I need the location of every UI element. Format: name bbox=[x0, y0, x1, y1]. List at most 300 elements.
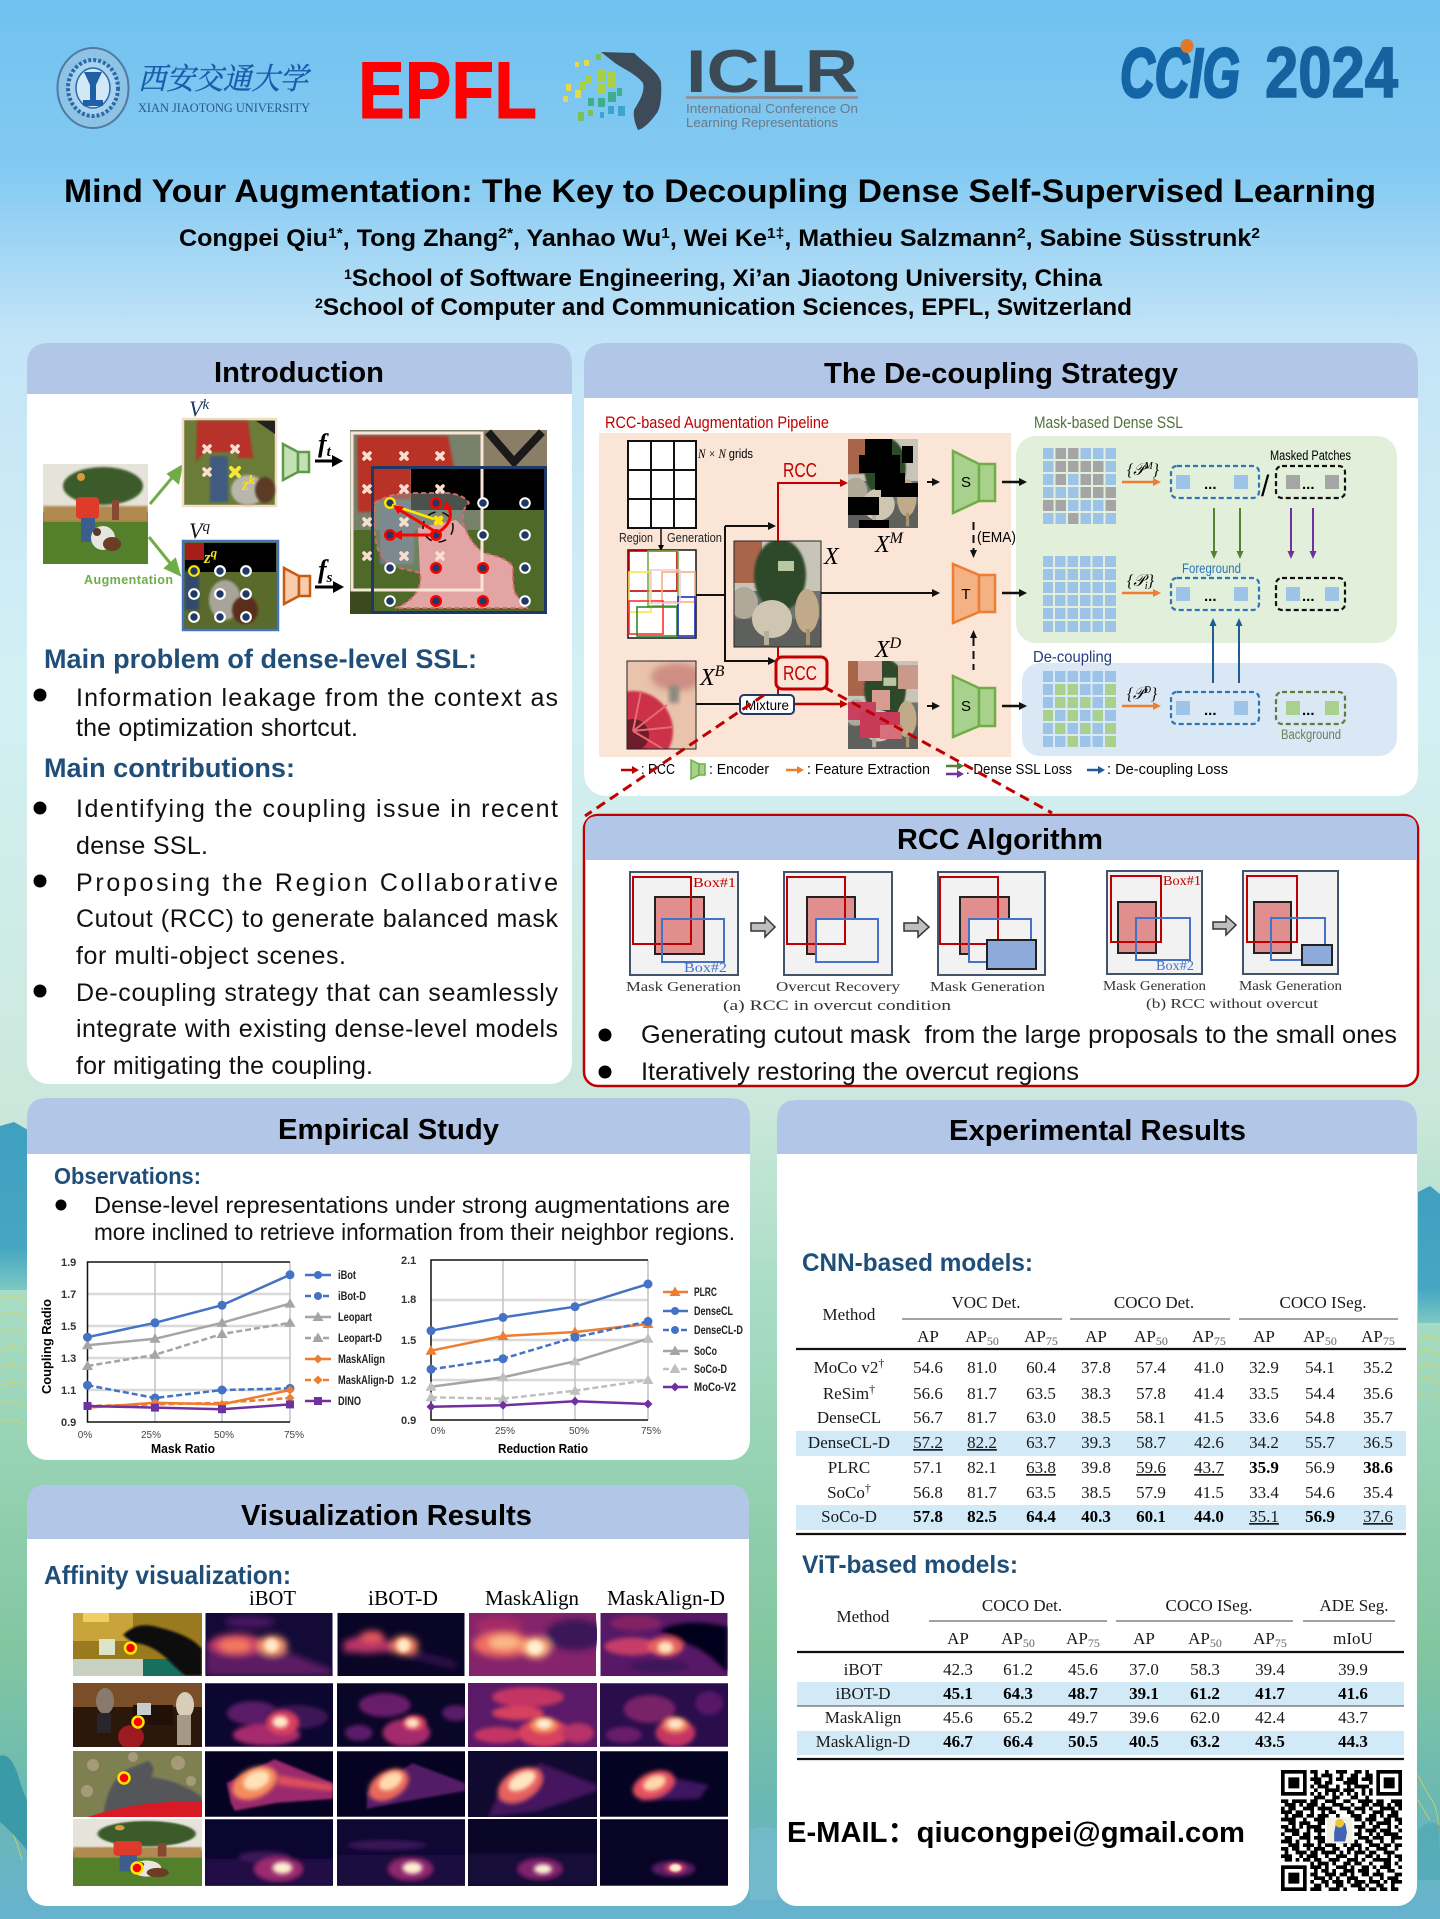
row: SoCo-D: 37.6 bbox=[1363, 1507, 1393, 1526]
row: iBOT: 61.2 bbox=[1003, 1660, 1033, 1679]
row: iBOT-D: 64.3 bbox=[1003, 1684, 1033, 1703]
logo: Xi'an Jiaotong University bbox=[58, 48, 312, 128]
row: MoCo v2: 37.8 bbox=[1081, 1358, 1111, 1377]
orange feature arrows bbox=[1122, 478, 1161, 710]
row: MoCo v2: 81.0 bbox=[967, 1358, 997, 1377]
table: ViT-based models: mIoU bbox=[1333, 1629, 1373, 1648]
row: SoCo-D: 82.5 bbox=[967, 1507, 997, 1526]
row: MaskAlign-D: 66.4 bbox=[1003, 1732, 1033, 1751]
table: ViT-based models: AP bbox=[1188, 1629, 1210, 1648]
authors: 2 bbox=[1251, 225, 1260, 242]
table: ViT-based models: AP bbox=[1133, 1629, 1155, 1648]
row: DenseCL bbox=[817, 1408, 1393, 1427]
row: iBOT-D: 39.1 bbox=[1129, 1684, 1159, 1703]
chart: reduction ratio: 1.5 bbox=[401, 1335, 416, 1347]
token set labels bbox=[1127, 460, 1159, 592]
table: CNN-based models: COCO ISeg. bbox=[1280, 1293, 1366, 1312]
chart: reduction ratio: Reduction Ratio bbox=[498, 1442, 588, 1456]
row: MoCo v2: † bbox=[878, 1356, 884, 1370]
row: iBOT: 39.9 bbox=[1338, 1660, 1368, 1679]
module: de-coupling: ... bbox=[1302, 702, 1315, 719]
chart: mask ratio: 50% bbox=[214, 1430, 234, 1441]
step 3 bbox=[938, 872, 1045, 975]
row: DenseCL-D: 63.7 bbox=[1026, 1433, 1056, 1452]
table: ViT-based models: AP bbox=[1001, 1629, 1023, 1648]
view Vq: V bbox=[189, 518, 202, 543]
text: main problem: Main problem of dense-level SSL: bbox=[44, 644, 477, 674]
row: DenseCL: 63.0 bbox=[1026, 1408, 1056, 1427]
row: MaskAlign-D: 63.2 bbox=[1190, 1732, 1220, 1751]
panel: Visualization Results bbox=[27, 1485, 749, 1906]
table: ViT-based models: 75 bbox=[1275, 1636, 1287, 1650]
row: SoCo: 54.6 bbox=[1305, 1483, 1335, 1502]
encoder S top: S bbox=[961, 474, 971, 491]
step 2 bbox=[784, 872, 892, 975]
label: RCC: RCC bbox=[783, 460, 817, 482]
token boxes bbox=[1171, 466, 1345, 610]
logo: ICLR: ICLR bbox=[686, 38, 858, 105]
chart: reduction ratio: 2.1 bbox=[401, 1255, 416, 1267]
row: DenseCL: 33.6 bbox=[1249, 1408, 1279, 1427]
chart: mask ratio: 0% bbox=[78, 1430, 92, 1441]
diagram: RCC in overcut condition bbox=[626, 872, 1045, 1014]
row: PLRC: 35.9 bbox=[1249, 1458, 1279, 1477]
text: observations: more inclined to retrieve information from their neighbor regions. bbox=[94, 1219, 735, 1245]
encoder: student bbox=[284, 568, 310, 604]
text: main contributions: Proposing the Region Collaborative bbox=[76, 869, 558, 897]
chart: mask ratio: 1.5 bbox=[61, 1321, 76, 1333]
row: MaskAlign: 62.0 bbox=[1190, 1708, 1220, 1727]
captions: Mask Generation bbox=[626, 979, 741, 994]
legend: : Feature Extraction bbox=[807, 761, 930, 778]
label: fs bbox=[315, 555, 344, 593]
row: SoCo-D: 57.8 bbox=[913, 1507, 943, 1526]
row: SoCo-D: 40.3 bbox=[1081, 1507, 1111, 1526]
patch grid: full bbox=[1043, 556, 1116, 632]
view Vq: q bbox=[202, 519, 210, 535]
row: DenseCL: 41.5 bbox=[1194, 1408, 1224, 1427]
red dashed zoom lines bbox=[585, 687, 1052, 816]
affiliations: 2 bbox=[315, 295, 323, 311]
affiliations bbox=[315, 265, 1132, 321]
image XD bbox=[845, 635, 918, 749]
legend: : De-coupling Loss bbox=[1107, 761, 1228, 778]
row: DenseCL-D: 82.2 bbox=[967, 1433, 997, 1452]
authors: 2 bbox=[1017, 225, 1026, 242]
view Vk: z bbox=[242, 475, 249, 494]
row: MaskAlign-D: 40.5 bbox=[1129, 1732, 1159, 1751]
row: iBOT: 37.0 bbox=[1129, 1660, 1159, 1679]
row: ReSim: 38.3 bbox=[1081, 1384, 1111, 1403]
row: MaskAlign-D bbox=[816, 1732, 1368, 1751]
captions: Box#2 bbox=[1156, 959, 1194, 974]
label: ft: t bbox=[327, 444, 332, 460]
image XB: X bbox=[700, 665, 715, 691]
legend bbox=[663, 1286, 743, 1394]
row: PLRC bbox=[828, 1458, 1393, 1477]
captions: Box#2 bbox=[684, 961, 727, 976]
row: DenseCL-D: 36.5 bbox=[1363, 1433, 1393, 1452]
authors: 2* bbox=[498, 225, 513, 242]
image XM bbox=[845, 437, 918, 558]
captions bbox=[626, 876, 1045, 1014]
pipeline: RCC-based augmentation bbox=[593, 414, 1016, 771]
view Vq: z bbox=[204, 548, 211, 567]
row: MaskAlign: 39.6 bbox=[1129, 1708, 1159, 1727]
table: ViT-based models: ADE Seg. bbox=[1320, 1596, 1388, 1615]
table: ViT-based models: COCO Det. bbox=[982, 1596, 1062, 1615]
text: main contributions: Main contributions: bbox=[44, 753, 295, 783]
image XB: B bbox=[715, 663, 725, 680]
table: ViT-based models: AP bbox=[1066, 1629, 1088, 1648]
module: de-coupling: De-coupling bbox=[1033, 649, 1112, 666]
table: CNN-based models: Method bbox=[823, 1305, 876, 1324]
N x N grid: Generation bbox=[667, 530, 722, 545]
encoder S bottom bbox=[953, 676, 995, 737]
image XM: X bbox=[875, 532, 890, 558]
subheading: CNN-based models: CNN-based models: bbox=[802, 1249, 1033, 1277]
row: DenseCL: 35.7 bbox=[1363, 1408, 1393, 1427]
chart: mask ratio: 1.1 bbox=[61, 1385, 76, 1397]
captions: Mask Generation bbox=[1103, 978, 1206, 993]
photo bbox=[73, 1819, 202, 1886]
row: ReSim: 63.5 bbox=[1026, 1384, 1056, 1403]
source photo bbox=[43, 464, 148, 564]
table: CNN-based models: 75 bbox=[1046, 1334, 1058, 1348]
chart: reduction ratio: 75% bbox=[641, 1426, 661, 1437]
row: PLRC: 63.8 bbox=[1026, 1458, 1056, 1477]
token boxes bbox=[1171, 692, 1345, 724]
row: iBOT-D: 41.6 bbox=[1338, 1684, 1368, 1703]
row: ReSim: 35.6 bbox=[1363, 1384, 1393, 1403]
row: SoCo-D: SoCo-D bbox=[821, 1507, 877, 1526]
text: main contributions: Identifying the coupling issue in recent bbox=[76, 795, 558, 823]
view Vq: q bbox=[211, 545, 218, 560]
row: MoCo v2: 57.4 bbox=[1136, 1358, 1166, 1377]
encoder S bottom: S bbox=[961, 698, 971, 715]
composite view bbox=[350, 430, 547, 614]
table: CNN-based models: 75 bbox=[1214, 1334, 1226, 1348]
label: fs: s bbox=[326, 570, 333, 586]
foreground blob bbox=[374, 493, 527, 608]
row: DenseCL: 58.1 bbox=[1136, 1408, 1166, 1427]
token set labels: } bbox=[1153, 460, 1159, 479]
module: de-coupling: } bbox=[1151, 684, 1157, 703]
chart: reduction ratio bbox=[401, 1255, 743, 1456]
captions: Overcut Recovery bbox=[776, 979, 900, 994]
step 2 bbox=[1243, 871, 1338, 974]
row 1 bbox=[73, 1613, 727, 1676]
row: ReSim: 81.7 bbox=[967, 1384, 997, 1403]
label: ft bbox=[315, 429, 343, 467]
heat maps bbox=[205, 1613, 333, 1676]
token set labels: } bbox=[1148, 571, 1154, 590]
row: MaskAlign: 45.6 bbox=[943, 1708, 973, 1727]
row 3 bbox=[73, 1751, 728, 1817]
authors: , Yanhao Wu bbox=[513, 225, 661, 252]
row: iBOT: 42.3 bbox=[943, 1660, 973, 1679]
table: CNN-based models: 75 bbox=[1383, 1334, 1395, 1348]
row: MoCo v2: 41.0 bbox=[1194, 1358, 1224, 1377]
column labels: iBOT-D bbox=[368, 1586, 438, 1610]
logo: conference 2024: CCIG bbox=[1120, 34, 1240, 112]
image X bbox=[730, 539, 840, 647]
row: MaskAlign: 43.7 bbox=[1338, 1708, 1368, 1727]
heading: The De-coupling Strategy: The De-coupling Strategy bbox=[824, 358, 1178, 390]
legend: SoCo-D bbox=[694, 1364, 727, 1376]
table: CNN-based models: AP bbox=[1134, 1327, 1156, 1346]
label: fs: f bbox=[318, 555, 327, 584]
chart: reduction ratio: 1.8 bbox=[401, 1294, 416, 1306]
row: MaskAlign-D: 46.7 bbox=[943, 1732, 973, 1751]
text: main contributions: integrate with existing dense-level models bbox=[76, 1015, 558, 1043]
legend: Leopart bbox=[338, 1312, 372, 1324]
step 1 bbox=[1107, 871, 1202, 974]
row: SoCo: 41.5 bbox=[1194, 1483, 1224, 1502]
row: PLRC: 38.6 bbox=[1363, 1458, 1393, 1477]
image XD: D bbox=[889, 635, 902, 652]
row: ReSim: ReSim bbox=[823, 1384, 869, 1403]
row: DenseCL: 81.7 bbox=[967, 1408, 997, 1427]
QR code bbox=[1281, 1770, 1402, 1891]
bullets bbox=[598, 1021, 1397, 1086]
module: mask-based dense SSL: Mask-based Dense SSL bbox=[1034, 414, 1183, 432]
table: CNN-based models: 50 bbox=[987, 1334, 999, 1348]
row: MaskAlign-D: 43.5 bbox=[1255, 1732, 1285, 1751]
legend: MoCo-V2 bbox=[694, 1382, 736, 1394]
panel: Empirical Study bbox=[27, 1098, 750, 1460]
logo: ICLR: International Conference On bbox=[686, 101, 858, 116]
subheading: ViT-based models: ViT-based models: bbox=[802, 1551, 1018, 1579]
bullets: Iteratively restoring the overcut regions bbox=[641, 1058, 1079, 1086]
photo bbox=[73, 1751, 202, 1817]
legend: MaskAlign bbox=[338, 1354, 385, 1366]
heat maps bbox=[205, 1751, 333, 1817]
encoder S top bbox=[953, 451, 995, 513]
row: SoCo: 63.5 bbox=[1026, 1483, 1056, 1502]
chart: reduction ratio: 1.2 bbox=[401, 1375, 416, 1387]
table: CNN-based models: 50 bbox=[1156, 1334, 1168, 1348]
column labels bbox=[249, 1586, 725, 1610]
label: Background: Background bbox=[1281, 727, 1341, 742]
row: MoCo v2: 35.2 bbox=[1363, 1358, 1393, 1377]
legend: DenseCL-D bbox=[694, 1325, 743, 1337]
image XM: M bbox=[889, 530, 905, 547]
row: MoCo v2: MoCo v2 bbox=[814, 1358, 878, 1377]
logo: Xi'an Jiaotong University: 西安交通大学 bbox=[138, 54, 312, 98]
table: ViT-based models: 75 bbox=[1088, 1636, 1100, 1650]
photo bbox=[73, 1613, 202, 1676]
label: ft: f bbox=[318, 429, 327, 458]
image XB bbox=[593, 661, 725, 771]
logo: ICLR: Learning Representations bbox=[686, 115, 838, 130]
row: DenseCL-D: DenseCL-D bbox=[808, 1433, 890, 1452]
row: MoCo v2 bbox=[814, 1356, 1393, 1377]
text: main problem bbox=[34, 644, 558, 742]
row: ReSim: 56.6 bbox=[913, 1384, 943, 1403]
row: DenseCL-D: 58.7 bbox=[1136, 1433, 1166, 1452]
authors: 1‡ bbox=[767, 225, 784, 242]
row: SoCo: 38.5 bbox=[1081, 1483, 1111, 1502]
row: iBOT: 45.6 bbox=[1068, 1660, 1098, 1679]
module: mask-based dense SSL: ... bbox=[1302, 588, 1315, 605]
legend: : RCC bbox=[641, 761, 675, 778]
chart: mask ratio: Coupling Radio bbox=[40, 1299, 54, 1394]
row: iBOT-D bbox=[835, 1684, 1368, 1703]
legend bbox=[305, 1270, 394, 1408]
row: PLRC: 57.1 bbox=[913, 1458, 943, 1477]
encoder T: T bbox=[961, 586, 971, 603]
row: MaskAlign-D: 50.5 bbox=[1068, 1732, 1098, 1751]
row: ReSim: † bbox=[869, 1382, 875, 1396]
row: DenseCL-D bbox=[808, 1433, 1393, 1452]
bullets: Generating cutout mask from the large proposals to the small ones bbox=[641, 1021, 1397, 1049]
heat maps bbox=[205, 1819, 333, 1886]
table: CNN-based models: AP bbox=[1085, 1327, 1107, 1346]
row: DenseCL: 38.5 bbox=[1081, 1408, 1111, 1427]
region proposals bbox=[628, 550, 696, 638]
row: PLRC: 59.6 bbox=[1136, 1458, 1166, 1477]
module: mask-based dense SSL: ... bbox=[1204, 476, 1217, 493]
legend: : Encoder bbox=[709, 761, 769, 778]
figure: dense-level SSL schematic bbox=[43, 396, 547, 630]
table: ViT-based models: COCO ISeg. bbox=[1166, 1596, 1252, 1615]
token set labels: i bbox=[1145, 580, 1148, 592]
table: ViT-based models: AP bbox=[947, 1629, 969, 1648]
panel: Experimental Results bbox=[777, 1100, 1417, 1906]
row: PLRC: 82.1 bbox=[967, 1458, 997, 1477]
chart: mask ratio: 1.3 bbox=[61, 1353, 76, 1365]
contact e-mail: E-MAIL：qiucongpei@gmail.com bbox=[787, 1817, 1245, 1849]
row: iBOT-D: 45.1 bbox=[943, 1684, 973, 1703]
authors: Congpei Qiu bbox=[179, 225, 322, 252]
authors: 1 bbox=[661, 225, 670, 242]
text: main contributions: De-coupling strategy that can seamlessly bbox=[76, 979, 558, 1007]
authors: , Tong Zhang bbox=[343, 225, 498, 252]
row: DenseCL-D: 42.6 bbox=[1194, 1433, 1224, 1452]
row: iBOT: 39.4 bbox=[1255, 1660, 1285, 1679]
pipeline: RCC-based augmentation: RCC-based Augmentation Pipeline bbox=[605, 414, 829, 432]
captions: Box#1 bbox=[693, 876, 736, 891]
row: ReSim bbox=[823, 1382, 1393, 1403]
table: CNN-based models: AP bbox=[1361, 1327, 1383, 1346]
table: CNN-based models: COCO Det. bbox=[1114, 1293, 1194, 1312]
view Vk: k bbox=[202, 397, 209, 413]
table: CNN-based models: AP bbox=[1192, 1327, 1214, 1346]
subheading: affinity visualization: Affinity visualization: bbox=[44, 1560, 291, 1590]
row: MaskAlign: MaskAlign bbox=[825, 1708, 902, 1727]
row: SoCo: 35.4 bbox=[1363, 1483, 1393, 1502]
view Vq bbox=[183, 518, 278, 630]
column labels: iBOT bbox=[249, 1586, 296, 1610]
label: Foreground: Foreground bbox=[1182, 561, 1241, 576]
box: RCC bbox=[776, 657, 827, 689]
token set labels: {𝒫 bbox=[1127, 571, 1146, 590]
step 1 bbox=[630, 872, 738, 975]
flow arrows to foreground bbox=[1210, 618, 1242, 683]
RCC connectors bbox=[696, 482, 934, 706]
row: SoCo-D: 60.1 bbox=[1136, 1507, 1166, 1526]
N x N grid bbox=[619, 441, 753, 551]
row: iBOT: iBOT bbox=[844, 1660, 883, 1679]
heading: RCC Algorithm: RCC Algorithm bbox=[897, 824, 1103, 856]
captions: Box#1 bbox=[1163, 874, 1201, 889]
box: Mixture: Mixture bbox=[745, 697, 789, 713]
N x N grid: N × N grids bbox=[697, 446, 753, 461]
legend: DenseCL bbox=[694, 1306, 733, 1318]
row: SoCo-D: 56.9 bbox=[1305, 1507, 1335, 1526]
row: MoCo v2: 32.9 bbox=[1249, 1358, 1279, 1377]
chart: mask ratio bbox=[40, 1257, 394, 1456]
heading: Experimental Results: Experimental Results bbox=[949, 1115, 1246, 1147]
view Vk bbox=[183, 396, 276, 506]
text: observations bbox=[54, 1163, 735, 1245]
captions: Mask Generation bbox=[930, 979, 1045, 994]
row: SoCo-D: 64.4 bbox=[1026, 1507, 1056, 1526]
row: MoCo v2: 60.4 bbox=[1026, 1358, 1056, 1377]
heading: Introduction: Introduction bbox=[214, 357, 384, 389]
EMA arrows: (EMA) bbox=[977, 529, 1016, 546]
token set labels: {𝒫 bbox=[1127, 460, 1146, 479]
text: main contributions bbox=[34, 753, 558, 1080]
row: PLRC: 43.7 bbox=[1194, 1458, 1224, 1477]
module: mask-based dense SSL: ... bbox=[1302, 476, 1315, 493]
row: DenseCL-D: 34.2 bbox=[1249, 1433, 1279, 1452]
logo: conference 2024: 2024 bbox=[1265, 34, 1398, 113]
encoder: teacher bbox=[283, 444, 309, 480]
legend: iBot-D bbox=[338, 1291, 366, 1303]
legend: MaskAlign-D bbox=[338, 1375, 394, 1387]
chart: reduction ratio: 0.9 bbox=[401, 1415, 416, 1427]
table: ViT-based models: AP bbox=[1253, 1629, 1275, 1648]
image XD: X bbox=[875, 637, 890, 663]
table: CNN-based models: AP bbox=[1303, 1327, 1325, 1346]
row: iBOT-D: iBOT-D bbox=[835, 1684, 891, 1703]
captions: Mask Generation bbox=[1239, 978, 1342, 993]
logo: conference 2024 bbox=[1120, 34, 1398, 113]
module: de-coupling: D bbox=[1143, 684, 1151, 696]
row: iBOT: 58.3 bbox=[1190, 1660, 1220, 1679]
text: main problem: the optimization shortcut. bbox=[76, 714, 358, 742]
module: mask-based dense SSL: ... bbox=[1204, 588, 1217, 605]
row: MaskAlign-D: MaskAlign-D bbox=[816, 1732, 910, 1751]
chart: reduction ratio: 0% bbox=[431, 1426, 445, 1437]
row: SoCo-D: 35.1 bbox=[1249, 1507, 1279, 1526]
table: ViT-based models: 50 bbox=[1023, 1636, 1035, 1650]
row: SoCo: † bbox=[865, 1481, 871, 1495]
heading: Empirical Study: Empirical Study bbox=[278, 1114, 499, 1146]
panel: Introduction bbox=[27, 343, 572, 1084]
legend: : Dense SSL Loss bbox=[966, 761, 1072, 778]
chart: reduction ratio: 25% bbox=[495, 1426, 515, 1437]
row: DenseCL-D: 55.7 bbox=[1305, 1433, 1335, 1452]
chart: mask ratio: 0.9 bbox=[61, 1417, 76, 1429]
row: SoCo-D: 44.0 bbox=[1194, 1507, 1224, 1526]
captions: (a) RCC in overcut condition bbox=[723, 998, 952, 1014]
box: RCC: RCC bbox=[783, 663, 817, 685]
heading: Visualization Results: Visualization Results bbox=[241, 1500, 532, 1532]
authors: 1* bbox=[328, 225, 343, 242]
row: SoCo bbox=[827, 1481, 1393, 1502]
label: Masked Patches: Masked Patches bbox=[1270, 448, 1351, 463]
row: SoCo-D bbox=[821, 1507, 1393, 1526]
patch grid: de-coupled bbox=[1043, 671, 1116, 747]
N x N grid: Region bbox=[619, 530, 653, 545]
captions bbox=[1103, 874, 1342, 1012]
label: Augmentation: Augmentation bbox=[84, 573, 173, 587]
patch grid: masked bbox=[1043, 448, 1116, 524]
table: CNN-based models: AP bbox=[965, 1327, 987, 1346]
